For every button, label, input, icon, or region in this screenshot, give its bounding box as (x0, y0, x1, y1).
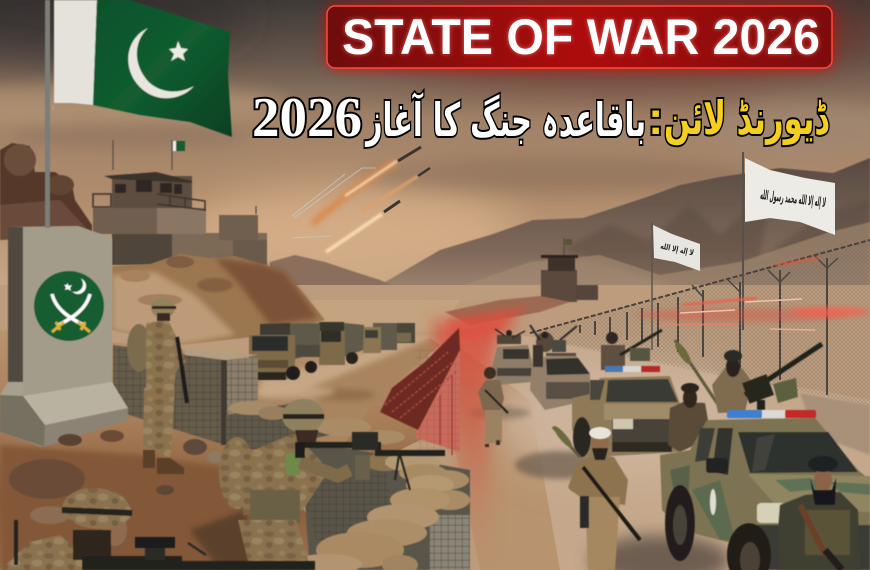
walking fighter (far left of road) (478, 367, 508, 447)
Pakistani flag on pole (45, 0, 232, 228)
foreground rifle (82, 537, 315, 570)
colon: : (648, 92, 663, 144)
year: 2026 (252, 87, 362, 149)
rifle (177, 337, 187, 403)
torso (243, 433, 328, 515)
watchtower: Pakistani post (93, 140, 267, 265)
backpack (127, 324, 151, 372)
far rocks behind the concrete block (0, 143, 92, 240)
red barbed coil and fence (380, 328, 460, 455)
title badge: STATE OF WAR 2026: STATE OF WAR 2026 (342, 9, 820, 65)
machine gun (295, 432, 445, 490)
missiles with smoke trails (292, 147, 430, 252)
helmet (282, 399, 324, 433)
arm (300, 462, 350, 476)
red glowing border line (432, 305, 530, 560)
subtitle: Urdu headline (252, 87, 830, 149)
backpack (219, 437, 255, 509)
white words: باقاعدہ جنگ کا آغاز (365, 92, 646, 147)
vest (250, 490, 300, 523)
fighter front right with rifle (778, 456, 860, 570)
soldier: standing guard (127, 298, 187, 474)
boots (143, 450, 184, 474)
legs (238, 520, 310, 570)
gunner on front truck (712, 344, 822, 413)
truck 3 (363, 323, 397, 353)
right border fence with posts (530, 240, 870, 405)
flags: small white flag (652, 222, 700, 350)
soldier: aiming machine gun (219, 399, 445, 570)
Afghan pickup 4 (far) (492, 329, 533, 385)
heavy machine gun (742, 344, 822, 410)
mountains: far right range (380, 158, 870, 330)
sky (0, 0, 870, 330)
Afghan pickup 2 with roof gunner (572, 330, 680, 462)
legs (143, 388, 175, 458)
truck 1 (249, 323, 320, 380)
helmet (151, 298, 175, 318)
sandbag wall behind aiming soldier (226, 401, 470, 570)
title badge: STATE OF WAR 2026: STATE OF WAR 2026 (342, 9, 820, 65)
Afghan pickup 1 (front) (660, 410, 870, 570)
flags: large white flag (743, 152, 835, 330)
fighter with RPG on second truck (668, 340, 717, 452)
watchtower: Afghan post (445, 238, 598, 325)
emblem: army crest (34, 271, 104, 341)
soldier: foreground with rifle (0, 488, 315, 570)
rocky hill behind the barrier (112, 254, 325, 345)
light bar (727, 410, 816, 418)
tracer fire (635, 258, 870, 330)
truck 2 (319, 322, 364, 365)
truck 4 (397, 323, 415, 343)
mountains: small left range (270, 255, 410, 310)
right side road and dust (440, 320, 870, 570)
truck convoy (245, 322, 415, 399)
concrete border marker with army emblem (0, 226, 128, 447)
ground (0, 285, 870, 570)
fighter walking with rifle (centre) (551, 424, 640, 570)
gunner (601, 330, 662, 370)
flags: small white flag: لا إله إلا الله (660, 242, 695, 257)
mid barrier: hesco wall (113, 345, 258, 445)
Afghan pickup 3 (530, 325, 590, 410)
foreground rocks (9, 430, 223, 524)
torso (146, 320, 186, 390)
